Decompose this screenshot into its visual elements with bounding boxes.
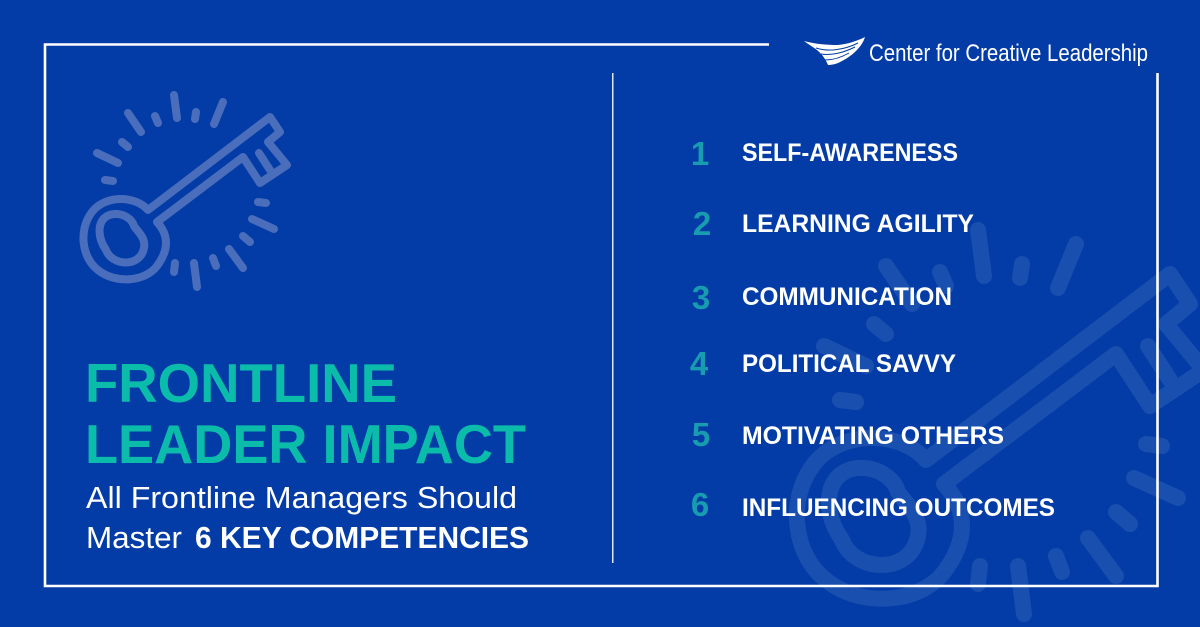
icon: feather wing	[804, 37, 865, 65]
competency 5: MOTIVATING OTHERS	[742, 422, 1004, 450]
logo wordmark: Center for Creative Leadership	[869, 40, 1148, 67]
competency 2	[693, 205, 974, 242]
competency 3: 3	[692, 279, 710, 316]
competency 5	[692, 416, 1004, 453]
competency 6: INFLUENCING OUTCOMES	[742, 494, 1055, 522]
divider	[612, 73, 614, 563]
competency 1: 1	[691, 135, 709, 172]
heading: Frontline Leader Impact: FRONTLINE	[85, 352, 397, 414]
subheading: All Frontline Managers Should	[86, 480, 517, 515]
competency 6	[691, 486, 1055, 523]
subheading	[86, 480, 529, 555]
heading: Frontline Leader Impact: LEADER IMPACT	[85, 413, 526, 475]
heading: Frontline Leader Impact	[85, 352, 526, 475]
competency 6: 6	[691, 486, 709, 523]
competency 2: LEARNING AGILITY	[742, 210, 974, 238]
competency 2: 2	[693, 205, 711, 242]
competency 5: 5	[692, 416, 710, 453]
competency 4: POLITICAL SAVVY	[742, 350, 956, 378]
subheading: Master	[86, 520, 182, 555]
competency 3	[692, 279, 952, 316]
competency 1: SELF-AWARENESS	[742, 139, 958, 167]
icon: key with light rays	[83, 95, 287, 287]
competency 4	[690, 345, 956, 382]
icon: large background key	[797, 230, 1200, 614]
competency 1	[691, 135, 958, 172]
competency 4: 4	[690, 345, 709, 382]
competency 3: COMMUNICATION	[742, 283, 952, 311]
logo: Center for Creative Leadership	[804, 37, 1148, 67]
subheading: 6 KEY COMPETENCIES	[195, 520, 529, 555]
